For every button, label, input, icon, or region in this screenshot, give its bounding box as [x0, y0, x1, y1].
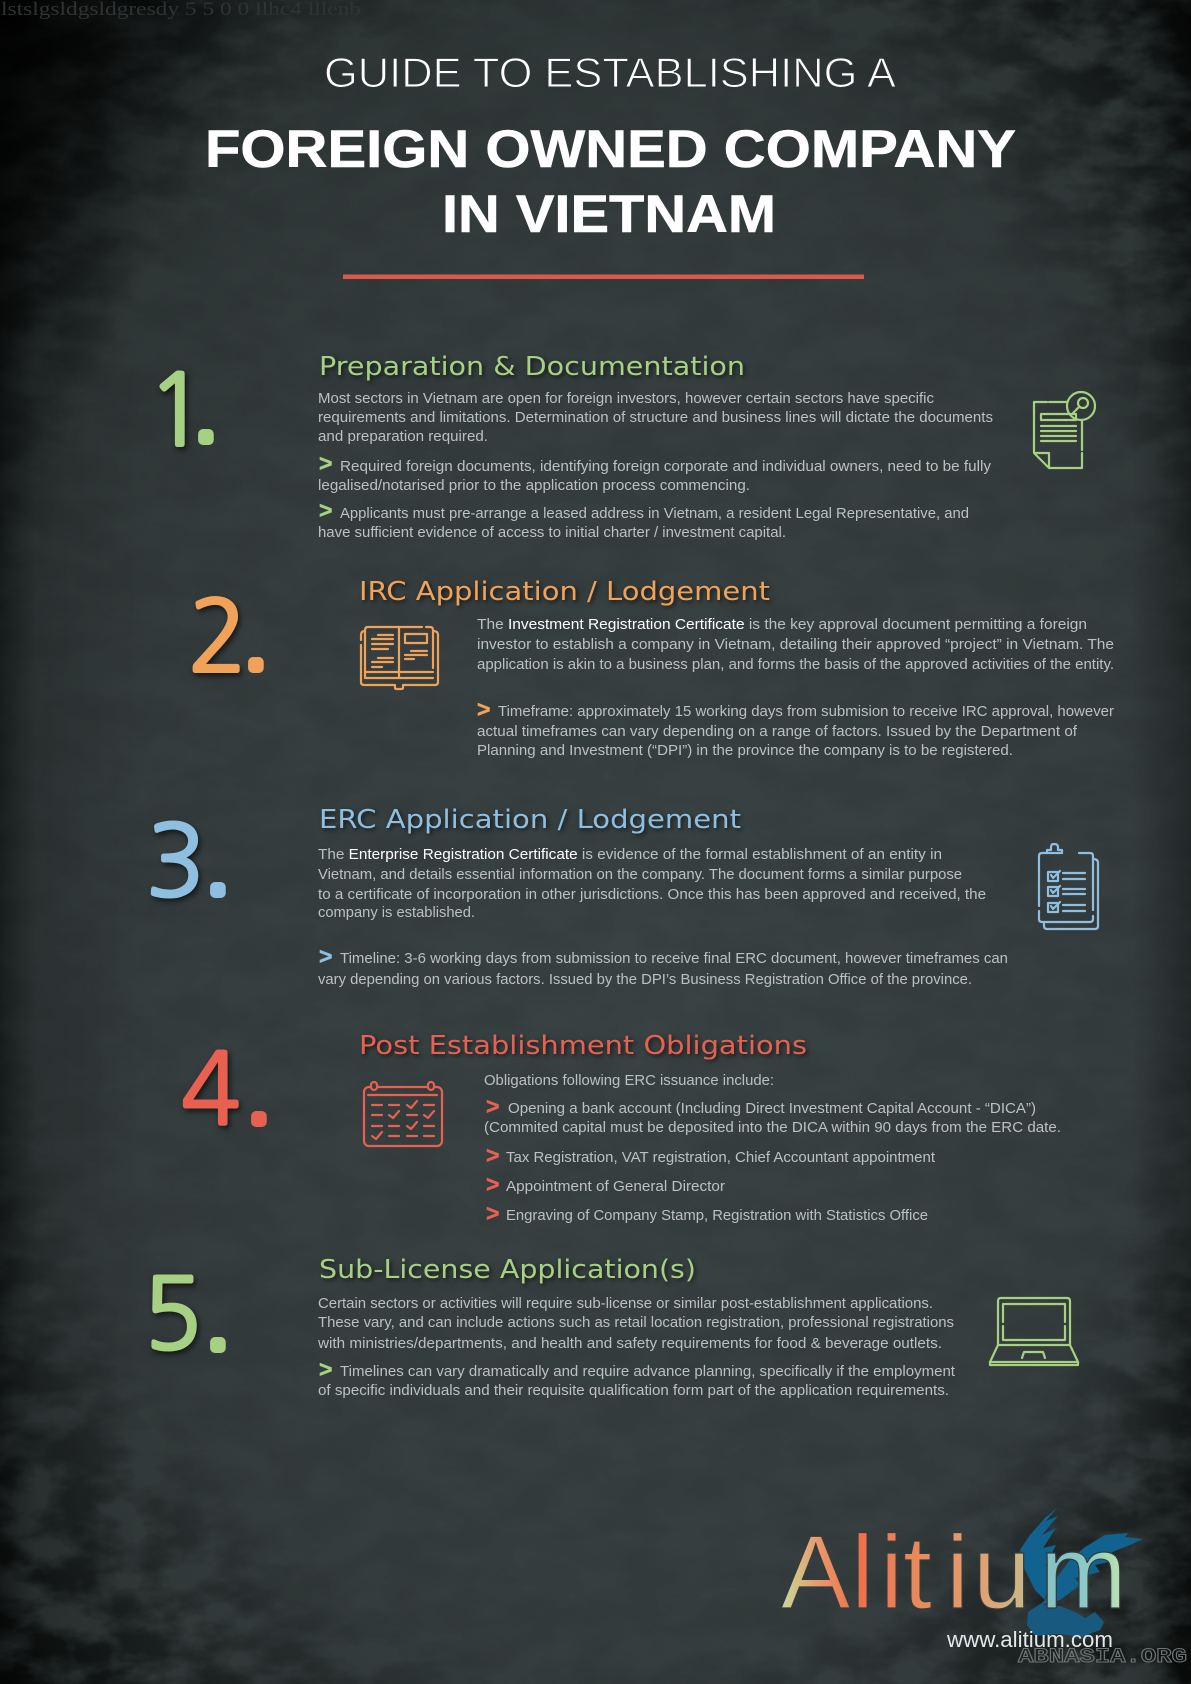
body text 5: with ministries/departments, and health and safety requirements for food & beverage outlets.	[317, 1336, 942, 1352]
icon: open book	[361, 627, 438, 689]
icon: checklist clipboard	[1039, 844, 1098, 929]
number 1: 1	[147, 362, 206, 460]
website url: www.alitium.com	[946, 1627, 1113, 1652]
number 3: .	[212, 858, 224, 902]
title block	[205, 49, 1016, 244]
body text 2: investor to establish a company in Vietnam, detailing their approved “project” in Vietnam. The	[477, 637, 1114, 653]
body text 2: The Investment Registration Certificate is the key approval document permitting a foreign	[477, 617, 1087, 633]
body text 1: >	[319, 497, 332, 523]
body text 3: Timeline: 3-6 working days from submission to receive final ERC document, however timeframes can	[340, 951, 1008, 967]
body text 1: Required foreign documents, identifying foreign corporate and individual owners, need to be fully	[340, 459, 992, 475]
heading 3: ERC Application / Lodgement	[319, 805, 741, 835]
body text 2: >	[477, 696, 490, 722]
body text 4: (Commited capital must be deposited into the DICA within 90 days from the ERC date.	[484, 1120, 1061, 1136]
body text 4: >	[486, 1093, 499, 1119]
icon: laptop	[990, 1298, 1078, 1365]
number 5: 5	[143, 1266, 202, 1364]
number 4: 4	[181, 1041, 240, 1139]
body text 1: Applicants must pre-arrange a leased address in Vietnam, a resident Legal Representative, and	[340, 506, 969, 522]
heading 5: Sub-License Application(s)	[319, 1255, 696, 1285]
body text 1	[318, 391, 993, 541]
body text 1: >	[319, 450, 332, 476]
body text 4: Tax Registration, VAT registration, Chief Accountant appointment	[506, 1150, 935, 1166]
body text 3	[318, 847, 1008, 988]
title line 1: GUIDE TO ESTABLISHING A	[324, 49, 896, 96]
body text 5: Certain sectors or activities will require sub-license or similar post-establishment applications.	[318, 1296, 933, 1312]
body text 2: Planning and Investment (“DPI”) in the province the company is to be registered.	[477, 743, 1013, 759]
heading 4: Post Establishment Obligations	[359, 1031, 807, 1061]
icon: blue bird	[1020, 1508, 1143, 1637]
body text 4: Appointment of General Director	[506, 1179, 725, 1195]
body text 1: have sufficient evidence of access to initial charter / investment capital.	[318, 525, 786, 541]
body text 2: actual timeframes can vary depending on a range of factors. Issued by the Department of	[477, 724, 1078, 740]
body text 1: legalised/notarised prior to the application process commencing.	[318, 478, 750, 494]
icon: document with magnifier	[1034, 392, 1095, 468]
body text 4: Opening a bank account (Including Direct Investment Capital Account - “DICA”)	[508, 1101, 1036, 1117]
body text 5	[317, 1296, 955, 1399]
number 2: 2	[188, 588, 247, 686]
logo: Alitium with bird	[781, 1508, 1143, 1652]
body text 2: Timeframe: approximately 15 working days from submision to receive IRC approval, however	[498, 704, 1114, 720]
body text 3: The Enterprise Registration Certificate is evidence of the formal establishment of an entity in	[318, 847, 942, 863]
body text 3: Vietnam, and details essential information on the company. The document forms a similar purpose	[318, 867, 962, 883]
body text 5: >	[319, 1356, 332, 1382]
body text 2: application is akin to a business plan, and forms the basis of the approved activities of the entity.	[477, 657, 1114, 673]
body text 3: to a certificate of incorporation in other jurisdictions. Once this has been approved and received, the	[318, 887, 986, 903]
section 2: IRC application	[188, 577, 1114, 759]
body text 1: and preparation required.	[318, 429, 488, 445]
section 3: ERC application	[146, 805, 1098, 988]
number 5: .	[212, 1313, 224, 1357]
heading 2: IRC Application / Lodgement	[359, 577, 770, 607]
title line 2: FOREIGN OWNED COMPANY	[205, 120, 1016, 179]
body text 4: Obligations following ERC issuance include:	[484, 1073, 774, 1089]
body text 2	[477, 617, 1114, 759]
number 2: .	[250, 633, 262, 677]
body text 4: >	[486, 1142, 499, 1168]
body text 5: of specific individuals and their requisite qualification form part of the application requirements.	[318, 1383, 949, 1399]
title line 3: IN VIETNAM	[442, 185, 776, 244]
body text 4: >	[486, 1171, 499, 1197]
heading 1: Preparation & Documentation	[319, 352, 745, 382]
section 4: post establishment obligations	[181, 1031, 1061, 1226]
body text 3: >	[319, 943, 332, 969]
body text 3: company is established.	[318, 905, 475, 921]
body text 4: >	[486, 1200, 499, 1226]
body text 3: vary depending on various factors. Issued by the DPI’s Business Registration Office of the province.	[318, 972, 972, 988]
body text 1: Most sectors in Vietnam are open for foreign investors, however certain sectors have specific	[318, 391, 934, 407]
number 4: .	[253, 1087, 265, 1131]
watermark: ABNASIA.ORG	[1018, 1646, 1187, 1669]
section 1: preparation and documentation	[147, 352, 1095, 541]
logo wordmark: Alitium	[781, 1515, 1127, 1631]
body text 4	[484, 1073, 1061, 1226]
icon: calendar	[364, 1082, 442, 1146]
number 1: .	[200, 405, 212, 449]
body text 1: requirements and limitations. Determination of structure and business lines will dictate the documents	[318, 410, 993, 426]
number 3: 3	[146, 813, 205, 911]
body text 5: These vary, and can include actions such as retail location registration, professional registrations	[318, 1315, 954, 1331]
body text 4: Engraving of Company Stamp, Registration with Statistics Office	[506, 1208, 928, 1224]
body text 5: Timelines can vary dramatically and require advance planning, specifically if the employment	[340, 1364, 955, 1380]
title divider	[343, 274, 864, 279]
section 5: sub-license applications	[143, 1255, 1078, 1399]
